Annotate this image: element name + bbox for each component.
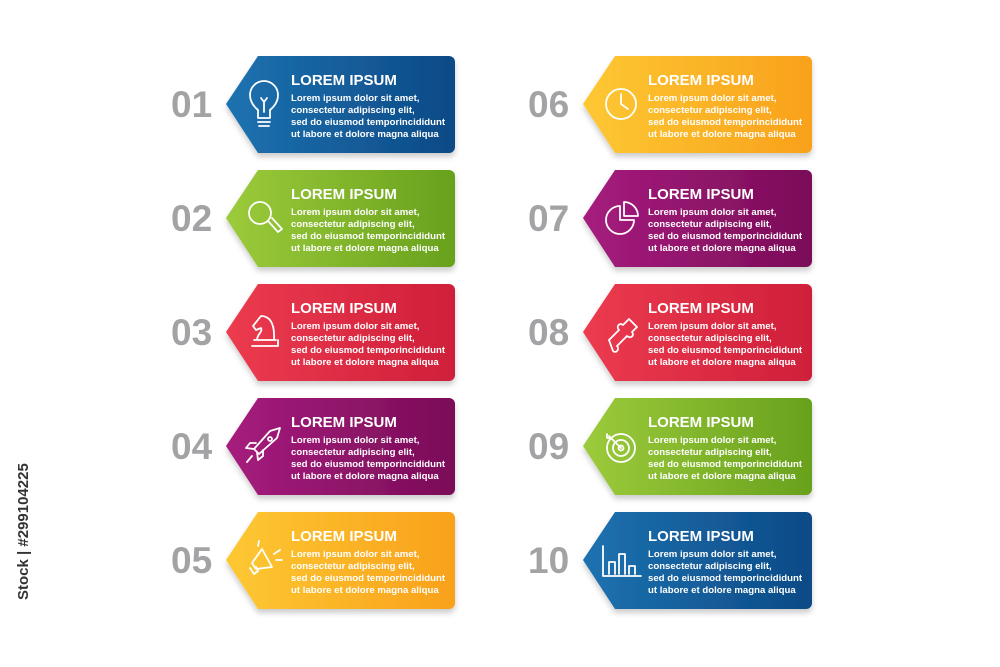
card 03: sed do eiusmod temporincididunt: [291, 345, 446, 356]
card 06: sed do eiusmod temporincididunt: [648, 117, 803, 128]
card 07: ut labore et dolore magna aliqua: [648, 243, 796, 254]
icon: target: [607, 434, 635, 462]
card 02: [171, 170, 455, 267]
card 05: ut labore et dolore magna aliqua: [291, 585, 439, 596]
icon: bulb: [250, 81, 278, 126]
card 10: sed do eiusmod temporincididunt: [648, 573, 803, 584]
card 10: ut labore et dolore magna aliqua: [648, 585, 796, 596]
card 06: 06: [528, 84, 569, 125]
card 05: consectetur adipiscing elit,: [291, 561, 415, 572]
icon: puzzle: [609, 319, 637, 352]
card 07: consectetur adipiscing elit,: [648, 219, 772, 230]
card 04: Lorem ipsum dolor sit amet,: [291, 435, 420, 446]
card 03: [171, 284, 455, 381]
card 09: consectetur adipiscing elit,: [648, 447, 772, 458]
card 10: [528, 512, 812, 609]
card 04: consectetur adipiscing elit,: [291, 447, 415, 458]
card 02: LOREM IPSUM: [291, 186, 397, 203]
card 06: LOREM IPSUM: [648, 72, 754, 89]
card 05: [171, 512, 455, 609]
icon: magnifier: [249, 202, 282, 232]
card 07: sed do eiusmod temporincididunt: [648, 231, 803, 242]
card 04: 04: [171, 426, 213, 467]
card 06: [528, 56, 812, 153]
card 09: ut labore et dolore magna aliqua: [648, 471, 796, 482]
card 08: [528, 284, 812, 381]
card 02: Lorem ipsum dolor sit amet,: [291, 207, 420, 218]
card 09: [528, 398, 812, 495]
card 01: Lorem ipsum dolor sit amet,: [291, 93, 420, 104]
card 08: 08: [528, 312, 569, 353]
card 08: ut labore et dolore magna aliqua: [648, 357, 796, 368]
card 03: 03: [171, 312, 212, 353]
card 04: ut labore et dolore magna aliqua: [291, 471, 439, 482]
card 09: 09: [528, 426, 569, 467]
card 08: LOREM IPSUM: [648, 300, 754, 317]
card 03: ut labore et dolore magna aliqua: [291, 357, 439, 368]
icon: knight: [252, 316, 278, 346]
card 01: consectetur adipiscing elit,: [291, 105, 415, 116]
card 01: ut labore et dolore magna aliqua: [291, 129, 439, 140]
icon: pie chart: [606, 202, 638, 234]
card 02: 02: [171, 198, 212, 239]
card 08: consectetur adipiscing elit,: [648, 333, 772, 344]
card 01: 01: [171, 84, 212, 125]
card 05: Lorem ipsum dolor sit amet,: [291, 549, 420, 560]
card 10: 10: [528, 540, 569, 581]
card 01: LOREM IPSUM: [291, 72, 397, 89]
card 03: LOREM IPSUM: [291, 300, 397, 317]
watermark id: Stock | #299104225: [15, 463, 32, 600]
card 03: Lorem ipsum dolor sit amet,: [291, 321, 420, 332]
card 04: LOREM IPSUM: [291, 414, 397, 431]
card 05: LOREM IPSUM: [291, 528, 397, 545]
card 08: Lorem ipsum dolor sit amet,: [648, 321, 777, 332]
icon: rocket: [246, 428, 280, 462]
card 05: 05: [171, 540, 212, 581]
card 02: sed do eiusmod temporincididunt: [291, 231, 446, 242]
card 09: sed do eiusmod temporincididunt: [648, 459, 803, 470]
card 04: [171, 398, 455, 495]
card 02: ut labore et dolore magna aliqua: [291, 243, 439, 254]
card 01: sed do eiusmod temporincididunt: [291, 117, 446, 128]
card 10: LOREM IPSUM: [648, 528, 754, 545]
card 02: consectetur adipiscing elit,: [291, 219, 415, 230]
card 07: Lorem ipsum dolor sit amet,: [648, 207, 777, 218]
card 10: consectetur adipiscing elit,: [648, 561, 772, 572]
card 06: Lorem ipsum dolor sit amet,: [648, 93, 777, 104]
card 07: 07: [528, 198, 569, 239]
icon: clock: [606, 89, 636, 119]
card 04: sed do eiusmod temporincididunt: [291, 459, 446, 470]
card 06: consectetur adipiscing elit,: [648, 105, 772, 116]
card 03: consectetur adipiscing elit,: [291, 333, 415, 344]
card 01: [171, 56, 455, 153]
card 10: Lorem ipsum dolor sit amet,: [648, 549, 777, 560]
icon: megaphone: [250, 541, 282, 574]
card 05: sed do eiusmod temporincididunt: [291, 573, 446, 584]
card 08: sed do eiusmod temporincididunt: [648, 345, 803, 356]
card 07: LOREM IPSUM: [648, 186, 754, 203]
card 06: ut labore et dolore magna aliqua: [648, 129, 796, 140]
card 09: Lorem ipsum dolor sit amet,: [648, 435, 777, 446]
card 09: LOREM IPSUM: [648, 414, 754, 431]
card 07: [528, 170, 812, 267]
icon: bar chart: [603, 546, 641, 576]
